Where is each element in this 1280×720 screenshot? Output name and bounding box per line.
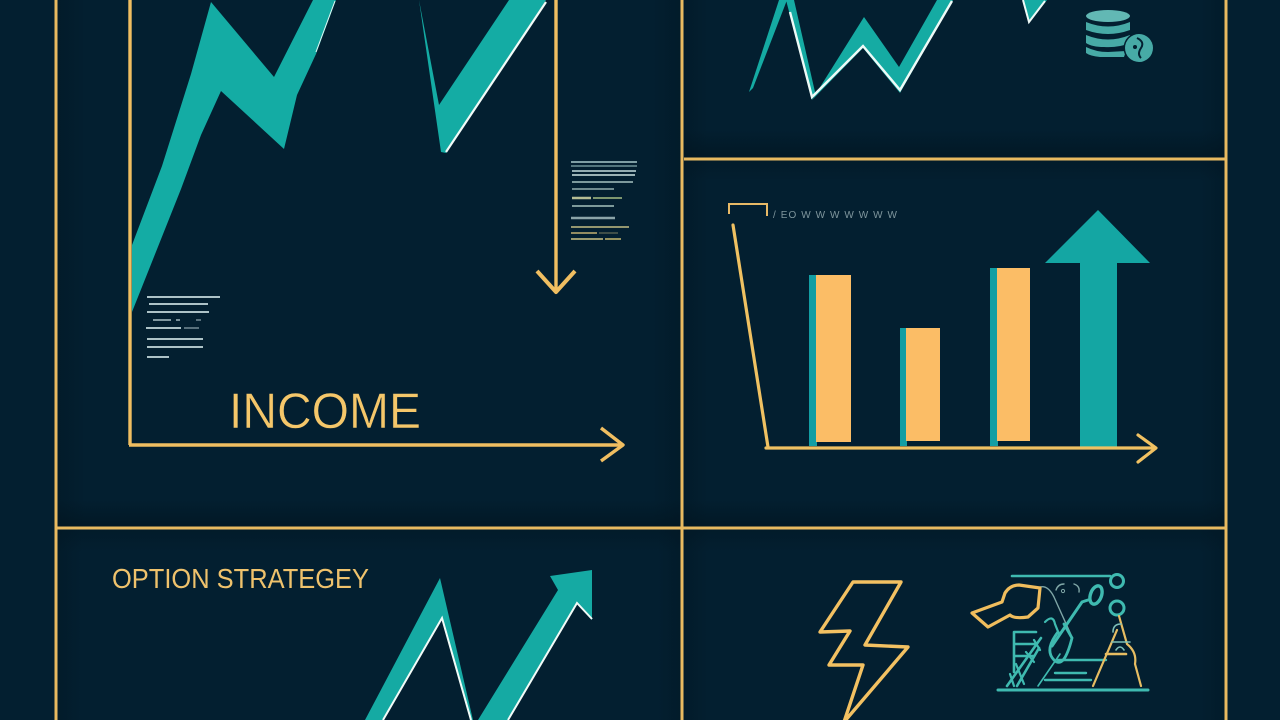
heading: income: INCOME (229, 383, 421, 439)
icon: orange hand (972, 585, 1040, 627)
chart: teal zigzag left (132, 0, 336, 312)
panel: option strategy (112, 563, 592, 720)
chart: teal zigzag with white edge (749, 0, 1047, 100)
panel: income chart (129, 0, 637, 461)
arrow: teal rising (1045, 210, 1150, 447)
icon: lightning bolt (820, 582, 908, 720)
bars (809, 268, 1030, 446)
panel: bottom right icons (820, 574, 1148, 720)
text block: right caption lines (571, 162, 637, 239)
icon: database and coin (1086, 10, 1154, 64)
text block: small axis label: / EO W W W W W W W (773, 210, 898, 221)
panel: top right zigzag chart (749, 0, 1154, 100)
chart: teal zigzag right (316, 0, 546, 153)
panel: bar chart with rising arrow (729, 204, 1156, 462)
heading: option strategy: OPTION STRATEGEY (112, 563, 369, 594)
icon: corner bracket (729, 204, 767, 216)
chart: teal rising arrow zigzag (365, 570, 592, 720)
axes with arrowhead (733, 225, 1156, 462)
text block: left caption lines (146, 297, 220, 357)
axes with arrowheads (129, 0, 623, 461)
icon: hand and diagram illustration (972, 574, 1148, 690)
